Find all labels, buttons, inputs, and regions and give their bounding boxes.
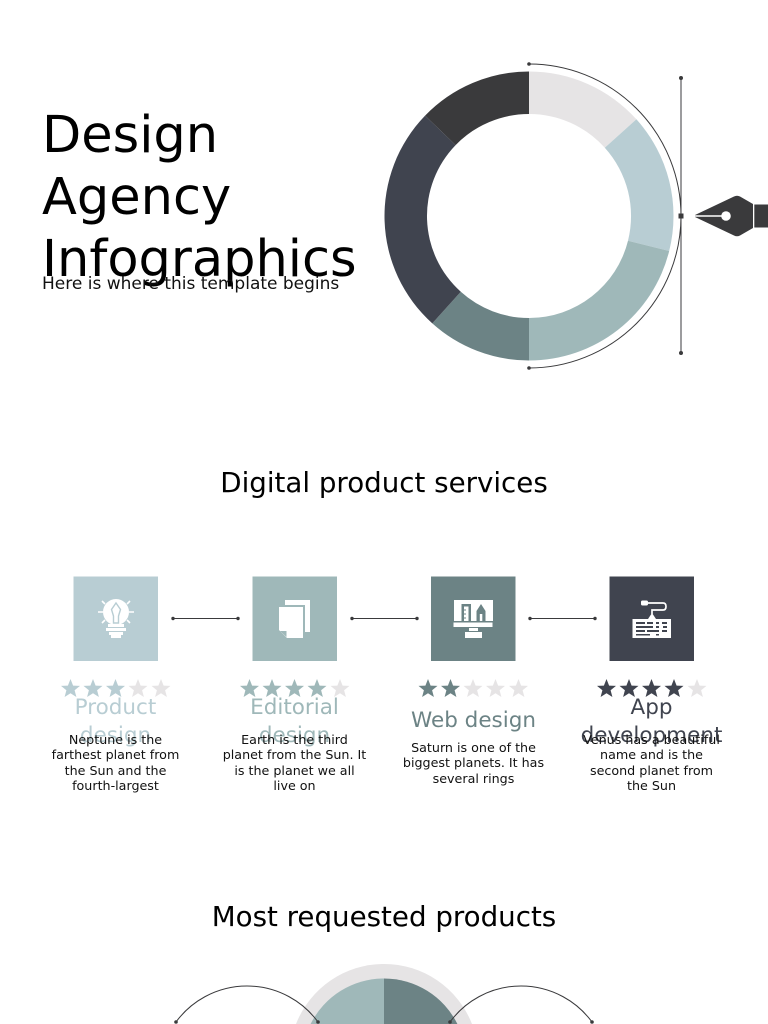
service text: web design: Saturn is one of the [411,740,536,755]
service text: app development [583,732,720,793]
outer arc guide [527,62,681,370]
service text: app development: the Sun [627,778,676,793]
title [42,106,357,289]
title: Agency [42,168,231,227]
service title: product design [75,695,156,748]
service text: product design: farthest planet from [52,747,179,762]
service text: app development: second planet from [590,763,713,778]
panel: web design icon [431,576,516,661]
service title: app development: App [630,695,672,720]
heading: digital product services: Digital product services [220,466,548,499]
service title: product design: Product [75,695,156,720]
vertical handle line [678,76,684,355]
service text: web design: several rings [433,771,514,786]
service text: app development: Venus has a beautiful [583,732,720,747]
service text: editorial design: is the planet we all [234,763,355,778]
title: Design [42,106,218,165]
subtitle: Here is where this template begins [42,274,339,294]
icon: pen nib [695,196,768,236]
service title: product design: design [80,723,151,748]
rating stars: product design [61,679,170,697]
service text: editorial design [223,732,366,793]
connector [171,617,240,620]
service title: editorial design [250,695,339,748]
right arc guide [448,986,594,1024]
service text: product design [52,732,179,793]
service title: editorial design: design [259,723,330,748]
connector [528,617,597,620]
left arc guide [174,986,320,1024]
service text: web design [403,740,544,786]
donut chart [384,71,674,360]
heading: most requested products: Most requested products [212,900,556,933]
panel: app development icon [610,576,694,661]
service text: web design: biggest planets. It has [403,755,544,770]
service text: product design: fourth-largest [72,778,159,793]
service text: editorial design: live on [273,778,316,793]
panel: editorial design icon [252,576,337,661]
service title: web design: Web design [411,708,536,733]
service title: app development [581,695,722,748]
rating stars: web design [418,679,528,697]
rating stars: editorial design [240,679,350,697]
service title: app development: development [581,723,722,748]
service title: editorial design: Editorial [250,695,339,720]
service text: product design: Neptune is the [69,732,162,747]
service text: editorial design: Earth is the third [241,732,348,747]
service text: editorial design: planet from the Sun. It [223,747,366,762]
panel: product design icon [74,576,158,661]
bottom circle chart [296,964,472,1024]
connector [350,617,419,620]
title: Infographics [42,230,357,289]
service text: app development: name and is the [600,747,703,762]
service text: product design: the Sun and the [65,763,166,778]
rating stars: app development [597,679,706,697]
